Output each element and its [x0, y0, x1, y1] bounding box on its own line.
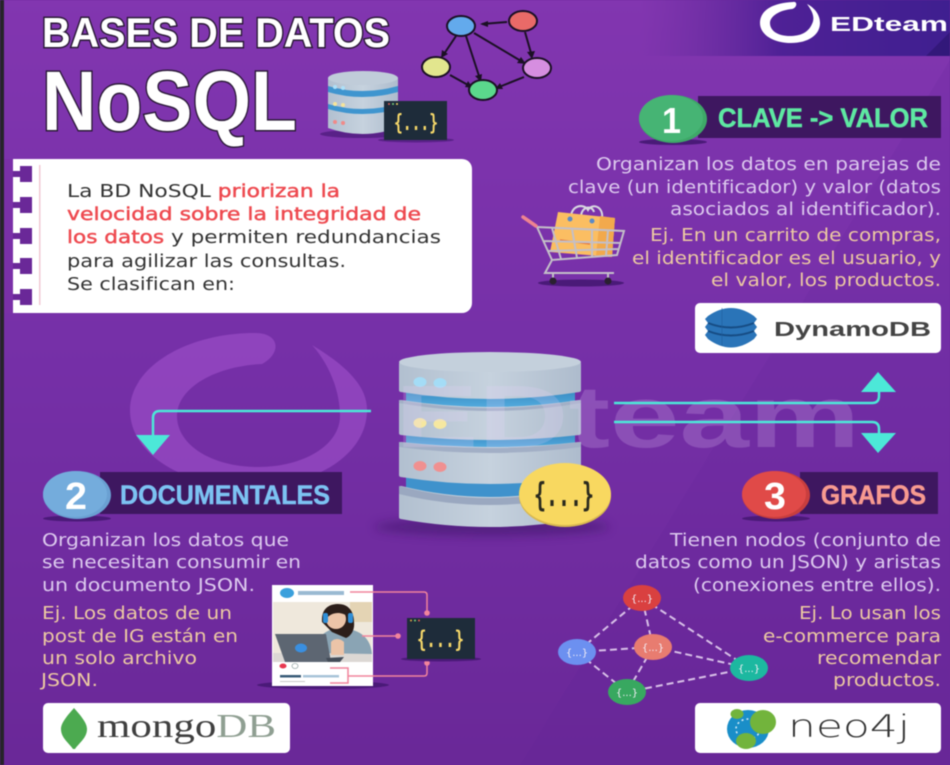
intro text: velocidad sobre la integridad de [67, 205, 421, 225]
title [42, 9, 390, 148]
text: grafos description: (conexiones entre ellos). [693, 576, 941, 596]
heading: grafos [742, 471, 938, 522]
intro text: los datos y permiten redundancias [67, 228, 441, 248]
arrow: to clave valor [614, 372, 896, 403]
text: clave valor example [632, 226, 941, 291]
text: clave valor description: Organizan los datos en parejas de [596, 155, 941, 175]
graph nodes diagram: {...} [616, 688, 638, 699]
text: documentales description: se necesitan consumir en [42, 553, 301, 573]
text: clave valor description: clave (un identificador) y valor (datos [568, 178, 941, 198]
icon: dynamodb cylinder [705, 308, 757, 348]
text: documentales example: JSON. [40, 671, 98, 691]
heading: clave valor: CLAVE -> VALOR [718, 103, 928, 133]
text: clave valor example: el identificador es el usuario, y [632, 249, 941, 269]
text: grafos description: datos como un JSON) y aristas [635, 553, 941, 573]
logo card: mongoDB [43, 703, 290, 753]
heading: grafos: GRAFOS [821, 480, 926, 510]
intro text: La BD NoSQL priorizan la [67, 182, 340, 202]
heading: documentales [43, 471, 342, 522]
text: documentales description: Organizan los datos que [42, 531, 289, 551]
title: BASES DE DATOS [42, 9, 390, 56]
icon: mongo leaf [61, 708, 87, 749]
graph nodes diagram [558, 585, 768, 705]
central database [374, 352, 611, 536]
panel: intro card [0, 159, 472, 313]
arrow: to documentales [136, 411, 371, 455]
icon: EDteam ring [760, 2, 820, 43]
heading: clave valor [639, 95, 941, 145]
logo card: mongoDB: mongo DB [97, 708, 276, 745]
intro text: Se clasifican en: [67, 275, 235, 295]
illustration: instagram post to JSON: {...} [417, 627, 464, 653]
heading: documentales: 2 [65, 476, 87, 518]
heading: clave valor: 1 [662, 100, 681, 141]
watermark text: EDteam [395, 367, 860, 466]
text: documentales example [40, 604, 238, 691]
text: documentales example: post de IG están en [42, 627, 238, 647]
text: clave valor description [568, 155, 941, 220]
icon: small database with JSON terminal [320, 71, 454, 142]
JSON badge: {...} [534, 475, 594, 514]
icon: shopping cart [523, 206, 624, 286]
status lights [414, 377, 446, 472]
graph nodes diagram: {...} [631, 594, 653, 605]
text: grafos example: recomendar [817, 649, 942, 669]
text: grafos example: Ej. Lo usan los [799, 604, 941, 624]
text: grafos description: Tienen nodos (conjunto de [669, 531, 941, 551]
intro text [67, 182, 441, 295]
notebook spiral tabs [0, 159, 40, 313]
top logo banner [640, 0, 950, 56]
illustration: instagram post to JSON [257, 585, 481, 689]
logo card: DynamoDB [695, 303, 941, 353]
text: grafos example [763, 604, 942, 691]
heading: grafos: 3 [764, 476, 786, 518]
arrow: to grafos [614, 422, 896, 453]
text: documentales example: un solo archivo [42, 649, 197, 669]
JSON badge [519, 463, 611, 527]
icon: directed graph [422, 11, 551, 100]
logo card: neo4j: neo4j [788, 709, 910, 745]
post photo [273, 602, 372, 662]
text: clave valor example: Ej. En un carrito de compras, [650, 226, 941, 246]
intro text: para agilizar las consultas. [67, 252, 346, 272]
heading: documentales: DOCUMENTALES [120, 480, 330, 510]
graph nodes diagram: {...} [566, 648, 588, 659]
text: grafos example: e-commerce para [763, 627, 941, 647]
logo card: DynamoDB: DynamoDB [774, 319, 931, 341]
text: documentales description [42, 531, 301, 596]
watermark ring [130, 333, 367, 487]
logo card: neo4j [695, 703, 941, 753]
icon: small database with JSON terminal: {...} [394, 111, 438, 136]
graph nodes diagram: {...} [738, 664, 760, 675]
text: documentales description: un documento JSON. [42, 576, 255, 596]
text: grafos description [635, 531, 941, 596]
icon: neo4j logo [727, 709, 776, 749]
text: documentales example: Ej. Los datos de un [42, 604, 232, 624]
title: NoSQL [42, 54, 297, 148]
text: clave valor description: asociados al identificador). [670, 200, 941, 220]
graph nodes diagram: {...} [642, 643, 664, 654]
top logo banner: EDteam [830, 14, 948, 36]
text: grafos example: productos. [833, 671, 941, 691]
text: clave valor example: el valor, los productos. [711, 271, 941, 291]
